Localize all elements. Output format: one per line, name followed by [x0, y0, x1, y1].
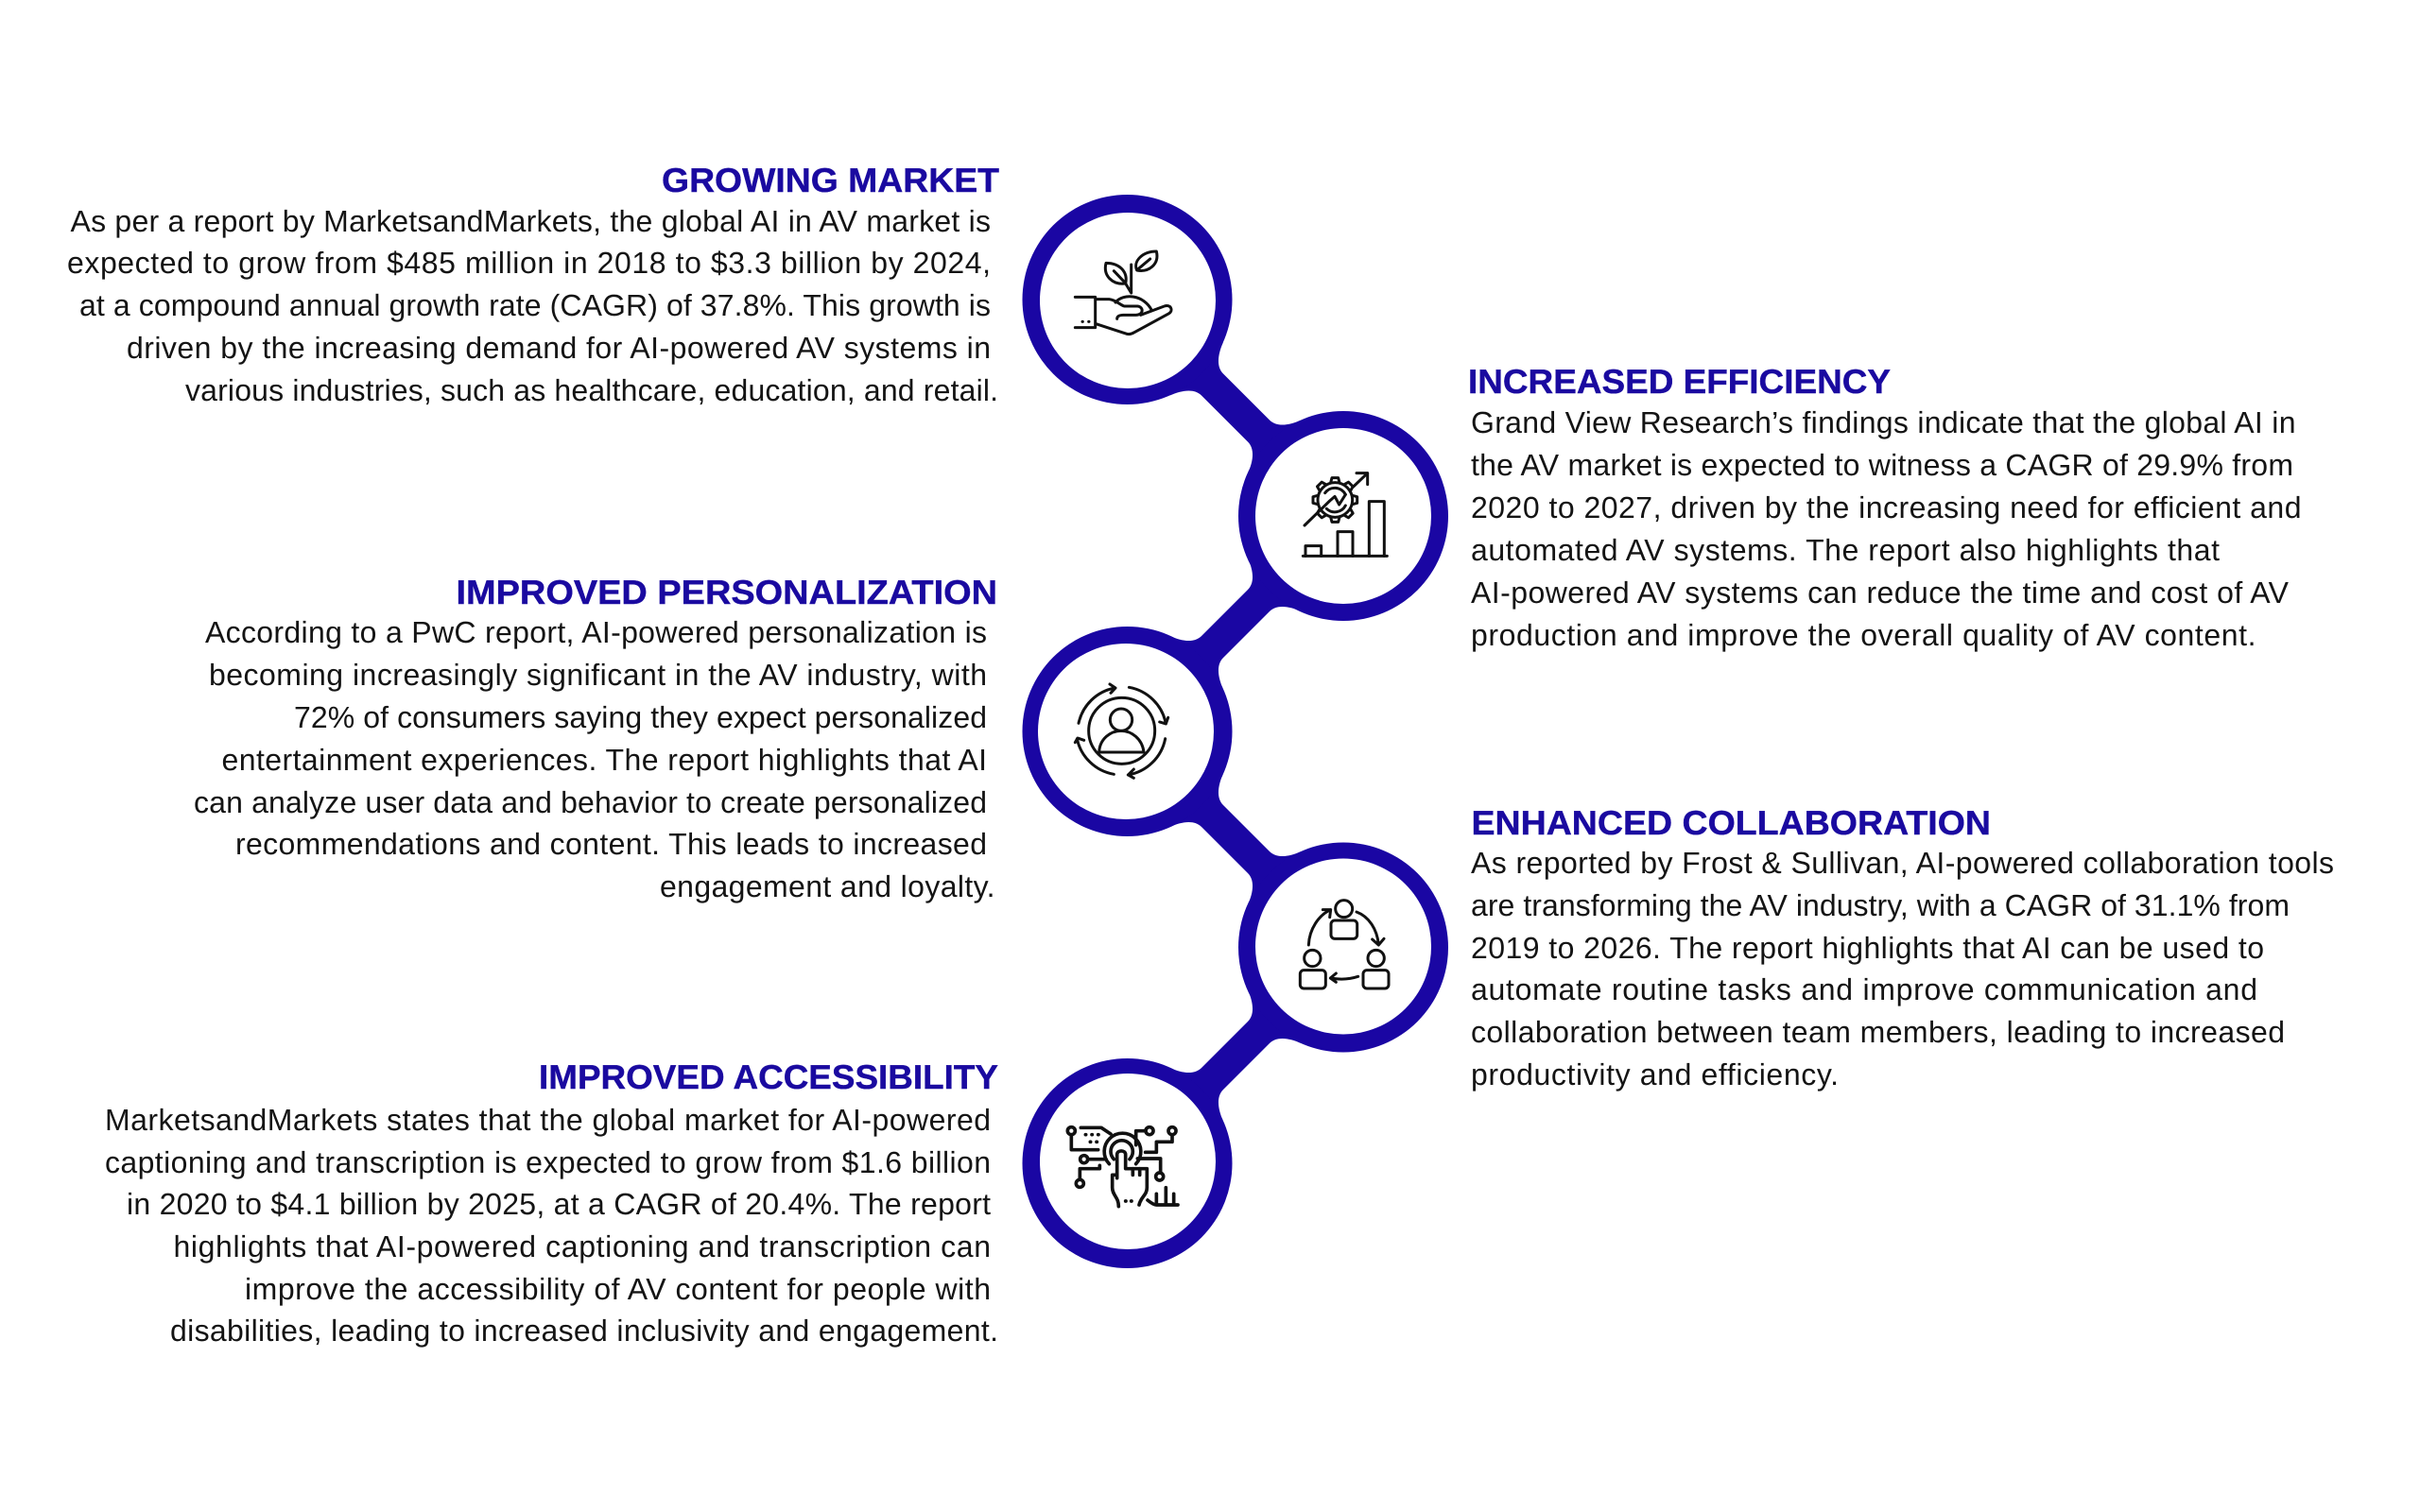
- text block: increased efficiency: production and improve the overall quality of AV content.: [1471, 618, 2256, 652]
- text block: increased efficiency: Grand View Research’s findings indicate that the global AI in: [1471, 405, 2295, 439]
- ring 5: [1023, 1058, 1233, 1268]
- text block: increased efficiency: [1471, 405, 2301, 652]
- heading: increased efficiency: INCREASED EFFICIENCY: [1468, 362, 1891, 401]
- text block: growing market: various industries, such as healthcare, education, and retail.: [185, 373, 998, 407]
- icon: person with circular arrows: [1075, 684, 1168, 778]
- text block: improved personalization: can analyze user data and behavior to create personalized: [194, 785, 987, 819]
- icon: team collaboration cycle: [1300, 901, 1389, 988]
- heading: growing market: GROWING MARKET: [662, 161, 999, 199]
- panel: increased efficiency: [1468, 362, 2301, 652]
- ring 3: [1023, 627, 1233, 836]
- heading: improved accessibility: IMPROVED ACCESSIBILITY: [539, 1057, 998, 1096]
- text block: enhanced collaboration: As reported by Frost & Sullivan, AI-powered collaboration tools: [1471, 846, 2334, 880]
- text block: growing market: As per a report by MarketsandMarkets, the global AI in AV market is: [70, 204, 991, 238]
- text block: improved personalization: 72% of consumers saying they expect personalized: [294, 700, 987, 734]
- text block: growing market: [67, 204, 998, 407]
- connector: circle 1 to 2: [1170, 342, 1301, 473]
- text block: improved accessibility: captioning and transcription is expected to grow from $1.6 billion: [105, 1145, 991, 1179]
- panel: enhanced collaboration: [1471, 803, 2334, 1091]
- text block: increased efficiency: 2020 to 2027, driven by the increasing need for efficient and: [1471, 490, 2301, 524]
- panel: growing market: [67, 161, 999, 407]
- text block: improved accessibility: disabilities, leading to increased inclusivity and engagement.: [170, 1314, 998, 1348]
- text block: increased efficiency: automated AV systems. The report also highlights that: [1471, 533, 2220, 567]
- heading: enhanced collaboration: ENHANCED COLLABORATION: [1471, 803, 1991, 842]
- text block: improved accessibility: [105, 1103, 998, 1348]
- text block: increased efficiency: the AV market is expected to witness a CAGR of 29.9% from: [1471, 448, 2293, 482]
- text block: enhanced collaboration: are transforming the AV industry, with a CAGR of 31.1% from: [1471, 888, 2290, 922]
- ring 2: [1238, 411, 1448, 621]
- text block: enhanced collaboration: productivity and efficiency.: [1471, 1057, 1839, 1091]
- text block: enhanced collaboration: collaboration between team members, leading to increased: [1471, 1015, 2285, 1049]
- text block: improved personalization: [194, 615, 994, 903]
- heading: improved personalization: IMPROVED PERSONALIZATION: [456, 573, 997, 611]
- connector: circle 3 to 4: [1170, 773, 1301, 905]
- icon: hand holding plant: [1075, 251, 1171, 335]
- text block: improved personalization: According to a PwC report, AI-powered personalization is: [205, 615, 987, 649]
- text block: improved personalization: entertainment experiences. The report highlights that AI: [221, 743, 987, 777]
- icon: touch on circuit: [1067, 1127, 1178, 1207]
- text block: improved personalization: recommendations and content. This leads to increased: [235, 827, 987, 861]
- panel: improved personalization: [194, 573, 997, 903]
- text block: growing market: driven by the increasing demand for AI-powered AV systems in: [127, 331, 991, 365]
- text block: improved accessibility: improve the accessibility of AV content for people with: [245, 1272, 991, 1306]
- connector: circle 2 to 3: [1170, 558, 1301, 690]
- text block: enhanced collaboration: automate routine tasks and improve communication and: [1471, 972, 2257, 1006]
- text block: improved accessibility: highlights that AI-powered captioning and transcription can: [174, 1229, 991, 1263]
- icon: gear and growth bars: [1303, 473, 1387, 556]
- text block: enhanced collaboration: 2019 to 2026. The report highlights that AI can be used to: [1471, 931, 2264, 965]
- text block: enhanced collaboration: [1471, 846, 2334, 1091]
- text block: improved personalization: engagement and loyalty.: [660, 869, 994, 903]
- ring 4: [1238, 843, 1448, 1053]
- text block: growing market: at a compound annual growth rate (CAGR) of 37.8%. This growth is: [79, 288, 991, 322]
- text block: improved accessibility: MarketsandMarkets states that the global market for AI-powered: [105, 1103, 991, 1137]
- text block: improved personalization: becoming increasingly significant in the AV industry, with: [209, 658, 987, 692]
- text block: increased efficiency: AI-powered AV systems can reduce the time and cost of AV: [1471, 576, 2290, 610]
- panel: improved accessibility: [105, 1057, 998, 1348]
- ring 1: [1023, 195, 1233, 404]
- text block: improved accessibility: in 2020 to $4.1 billion by 2025, at a CAGR of 20.4%. The report: [127, 1187, 991, 1221]
- connector: circle 4 to 5: [1170, 990, 1301, 1121]
- chain of connected circles: [1023, 195, 1448, 1268]
- text block: growing market: expected to grow from $485 million in 2018 to $3.3 billion by 2024,: [67, 246, 991, 280]
